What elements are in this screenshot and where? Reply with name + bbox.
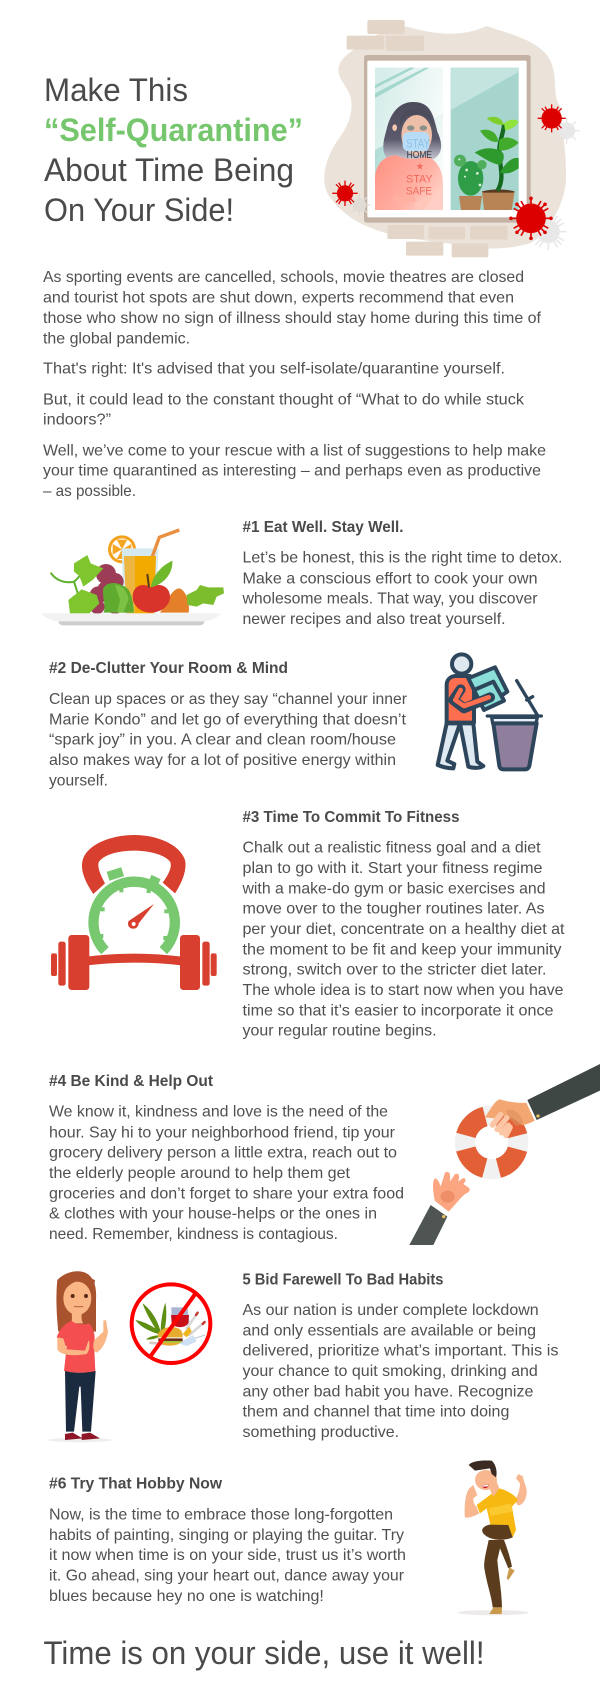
section 3 text: plan to go with it. Start your fitness regime — [242, 860, 543, 877]
section 4 text: grocery delivery person a little extra, reach out to — [49, 1145, 397, 1162]
section 3 text: your regular routine begins. — [242, 1023, 436, 1040]
section 4 text: groceries and don’t forget to share your extra food — [49, 1185, 404, 1202]
title — [44, 72, 303, 228]
section 5 text: your chance to quit smoking, drinking and — [242, 1363, 538, 1380]
section 4 text: hour. Say hi to your neighborhood friend, tip your — [49, 1124, 396, 1141]
section 3 text: time so that it’s easier to incorporate it once — [242, 1002, 554, 1019]
section 1 text: Let’s be honest, this is the right time to detox. — [242, 550, 562, 567]
icon: helping hand with lifebuoy — [409, 1064, 600, 1245]
intro text: – as possible. — [43, 483, 136, 500]
section 2 text: also makes way for a lot of positive energy within — [49, 752, 396, 769]
section 3 text: The whole idea is to start now when you have — [242, 982, 564, 999]
illustration: woman at window with viruses — [324, 20, 580, 257]
title: On Your Side! — [44, 192, 234, 228]
illustration: woman at window with viruses: STAY — [406, 174, 433, 186]
section 1 text: wholesome meals. That way, you discover — [242, 591, 538, 608]
section 1 text — [242, 519, 563, 628]
intro text: Well, we’ve come to your rescue with a list of suggestions to help make — [43, 442, 546, 459]
viruses — [348, 117, 580, 250]
section 4 text: need. Remember, kindness is contagious. — [49, 1226, 338, 1243]
icon: dancing man — [458, 1460, 529, 1615]
icon: kettlebell stopwatch barbell — [51, 835, 217, 990]
intro text: your time quarantined as interesting – and perhaps even as productive — [43, 463, 541, 480]
section 5 text — [242, 1272, 558, 1441]
woman — [383, 102, 441, 159]
intro text: But, it could lead to the constant thought of “What to do while stuck — [43, 391, 525, 408]
section 5 text: and only essentials are available or being — [242, 1322, 536, 1339]
section 4 text: & clothes with your house-helps or the ones in — [49, 1206, 377, 1223]
section 5 text: As our nation is under complete lockdown — [242, 1302, 539, 1319]
icon: plate of healthy food — [42, 530, 224, 625]
window frame — [364, 55, 531, 223]
section 3 text: per your diet, concentrate on a healthy diet at — [242, 921, 565, 938]
section 3 text: Chalk out a realistic fitness goal and a diet — [242, 840, 541, 857]
icon: person throwing box in trash — [438, 654, 541, 769]
section 4 text: We know it, kindness and love is the need of the — [49, 1104, 388, 1121]
section 3 text: with a make-do gym or basic exercises and — [242, 880, 545, 897]
section 6 text — [49, 1476, 406, 1605]
intro text: As sporting events are cancelled, schools, movie theatres are closed — [43, 269, 524, 286]
section 4 text: the elderly people around to help them get — [49, 1165, 351, 1182]
section 1 text: #1 Eat Well. Stay Well. — [242, 519, 404, 536]
illustration: woman at window with viruses: STAY — [406, 136, 430, 150]
icon: no bad habits sign — [132, 1284, 210, 1363]
section 6 text: #6 Try That Hobby Now — [49, 1476, 223, 1492]
section 2 text: yourself. — [49, 772, 108, 789]
section 3 text — [242, 809, 565, 1040]
section 3 text: move over to the tougher routines later. As — [242, 901, 544, 918]
section 1 text: newer recipes and also treat yourself. — [242, 611, 506, 628]
title: About Time Being — [44, 152, 294, 188]
section 5 text: them and channel that time into doing — [242, 1404, 509, 1421]
illustration: woman at window with viruses: ★ — [416, 161, 424, 171]
section 5 text: something productive. — [242, 1424, 399, 1441]
section 6 text: it now when time is on your side, trust us it’s worth — [49, 1547, 406, 1564]
section 5 text: 5 Bid Farewell To Bad Habits — [242, 1272, 444, 1288]
illustration: woman at window with viruses: HOME — [407, 150, 432, 161]
section 6 text: Now, is the time to embrace those long-forgotten — [49, 1506, 393, 1524]
section 2 text — [49, 660, 408, 789]
section 2 text: “spark joy” in you. A clear and clean room/house — [49, 732, 396, 749]
section 2 text: Marie Kondo” and let go of everything that doesn’t — [49, 711, 407, 728]
section 3 text: strong, switch over to the stricter diet later. — [242, 962, 546, 979]
section 6 text: habits of painting, singing or playing the guitar. Try — [49, 1527, 404, 1544]
section 1 text: Make a conscious effort to cook your own — [242, 570, 538, 587]
section 5 text: delivered, prioritize what’s important. This is — [242, 1343, 558, 1360]
section 4 text — [49, 1073, 404, 1243]
section 3 text: #3 Time To Commit To Fitness — [242, 809, 460, 826]
illustration: woman at window with viruses: SAFE — [406, 186, 432, 198]
section 4 text: #4 Be Kind & Help Out — [49, 1073, 213, 1090]
section 5 text: any other bad habit you have. Recognize — [242, 1383, 533, 1400]
icon: woman refusing — [48, 1271, 112, 1442]
section 6 text: blues because hey no one is watching! — [49, 1588, 324, 1605]
intro text: the global pandemic. — [43, 330, 190, 347]
intro text — [43, 269, 546, 500]
plants — [458, 161, 483, 196]
intro text: those who show no sign of illness should stay home during this time of — [43, 310, 542, 327]
closing line: Time is on your side, use it well! — [44, 1635, 484, 1671]
title: Make This — [44, 72, 188, 108]
intro text: and tourist hot spots are shut down, experts recommend that even — [43, 290, 514, 306]
section 2 text: #2 De-Clutter Your Room & Mind — [49, 660, 288, 677]
section 3 text: the moment to be fit and keep your immunity — [242, 941, 562, 958]
title: “Self-Quarantine” — [44, 112, 303, 148]
section 2 text: Clean up spaces or as they say “channel your inner — [49, 691, 408, 708]
intro text: indoors?” — [43, 412, 111, 429]
intro text: That's right: It's advised that you self-isolate/quarantine yourself. — [43, 361, 505, 378]
section 6 text: it. Go ahead, sing your heart out, dance away your — [49, 1568, 405, 1585]
